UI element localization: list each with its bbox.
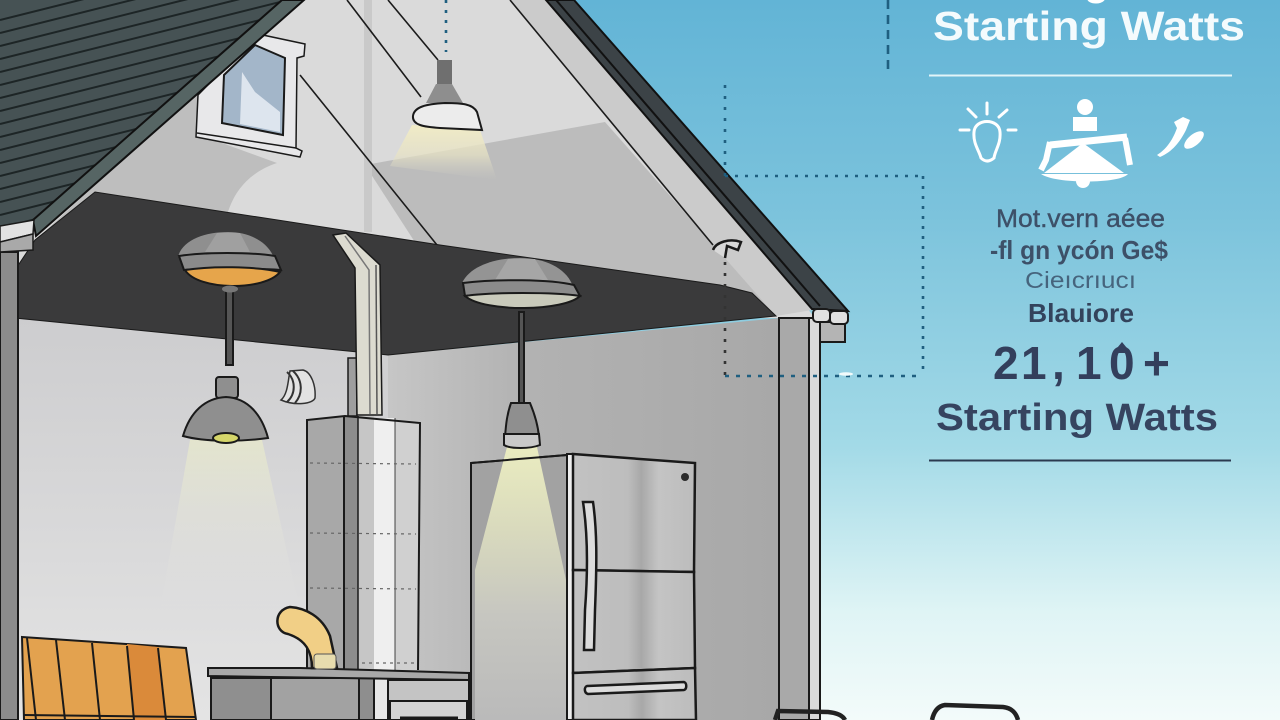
orange bench <box>22 637 196 720</box>
small pendant lamp <box>504 403 540 448</box>
vertical door handle <box>583 502 596 650</box>
garbled description text <box>990 205 1169 328</box>
left eave trim <box>0 220 34 252</box>
pendant lamp <box>183 377 268 443</box>
right wall <box>388 318 780 720</box>
gable vertical pipe <box>364 0 372 232</box>
icon: hammer <box>1157 117 1207 157</box>
white heading: Starting Watts <box>933 3 1245 49</box>
left roof fascia <box>33 0 304 236</box>
icon: light bulb <box>960 103 1016 161</box>
refrigerator side panel <box>471 455 567 720</box>
garbled description text: -fl gn ycón Ge$ <box>990 235 1169 265</box>
garbled description text: Blauiore <box>1028 298 1134 328</box>
dark heading: Starting Watts <box>936 397 1218 439</box>
left roof shingles <box>0 0 280 226</box>
wall hook bracket <box>713 240 741 258</box>
gable structural lines <box>300 0 713 245</box>
dark divider <box>929 460 1231 462</box>
furnace unit <box>307 416 420 670</box>
dark ceiling <box>15 192 776 355</box>
shaded gable area <box>365 122 776 316</box>
refrigerator upper door <box>573 454 695 572</box>
garbled description text: Mot.vern aéee <box>996 205 1165 233</box>
wall outlet fixture <box>281 370 315 404</box>
refrigerator lower door <box>573 668 696 720</box>
vent duct <box>333 233 382 416</box>
left side column <box>0 252 18 720</box>
refrigerator <box>567 454 696 720</box>
yellow elbow pipe <box>277 607 337 669</box>
ceiling lamp right <box>462 258 580 405</box>
refrigerator middle door <box>573 570 695 673</box>
right roof inner stripe <box>556 0 820 306</box>
icon: ceiling lamp <box>1041 99 1130 188</box>
generator handles <box>775 705 1018 720</box>
shaded gable area under window <box>40 50 277 236</box>
refrigerator light cone <box>475 447 566 720</box>
garbled description text: Cieıcrıucı <box>1025 267 1136 293</box>
gable strip beside roof <box>510 0 812 316</box>
kitchen counter and cabinet <box>208 668 469 720</box>
dotted callout lines <box>446 0 923 378</box>
attic hanging lamp <box>413 60 482 130</box>
refrigerator badge dot <box>681 473 689 481</box>
right side column <box>779 318 820 720</box>
refrigerator side top edge <box>471 455 567 463</box>
callout highlight mark <box>839 372 853 376</box>
attic lamp light <box>390 125 497 180</box>
drop tip on zero <box>1113 342 1131 353</box>
ceiling lamp left <box>178 232 281 365</box>
gable wall <box>15 0 815 318</box>
right gutter end <box>813 309 848 342</box>
pendant lamp light <box>160 440 300 610</box>
horizontal drawer handle <box>585 682 686 694</box>
attic window <box>196 34 305 157</box>
white divider <box>929 74 1232 76</box>
right roof band <box>546 0 848 311</box>
house <box>0 0 848 720</box>
left wall <box>18 318 388 720</box>
wattage number: 21,10+ <box>993 337 1170 389</box>
